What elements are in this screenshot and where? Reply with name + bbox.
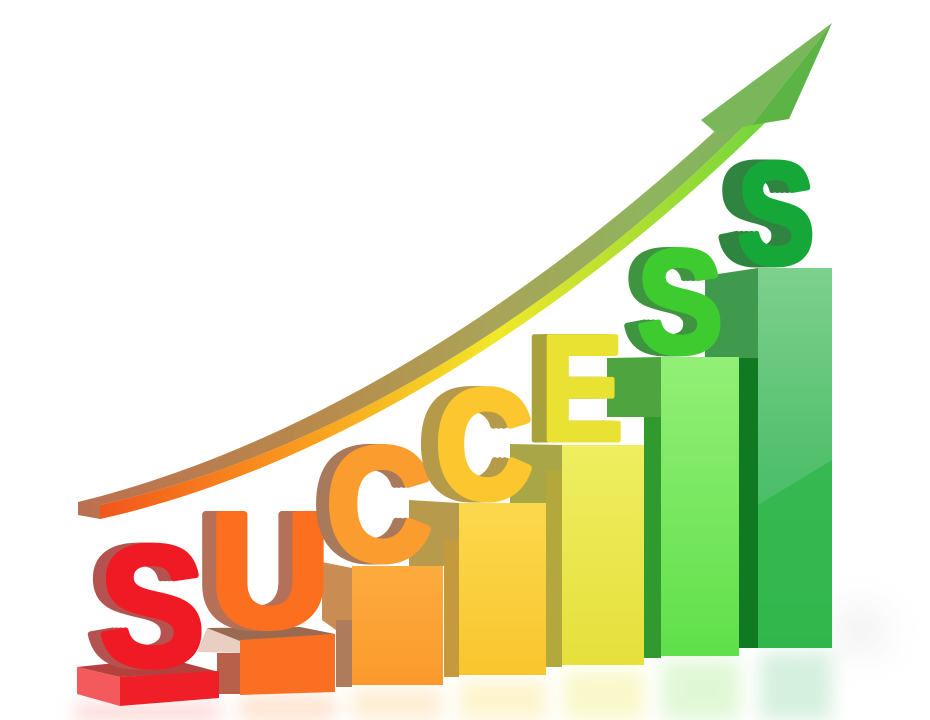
letter C, light orange: C bbox=[323, 416, 427, 594]
arrow shaft side bbox=[78, 122, 745, 519]
letter U, orange: U bbox=[206, 479, 326, 660]
growth arrow bbox=[78, 23, 832, 519]
letter S, red: S bbox=[94, 511, 200, 701]
letter S, dark green: S bbox=[718, 133, 794, 294]
letter C, amber: C bbox=[424, 359, 520, 530]
bar 3 light orange bbox=[322, 562, 443, 687]
letter C, amber: C bbox=[436, 359, 532, 530]
floor shadow and reflections bbox=[75, 610, 885, 720]
letter S, red: S bbox=[90, 511, 196, 701]
letter E, yellow: E bbox=[535, 305, 619, 473]
bar 4 amber bbox=[409, 500, 546, 677]
letter S, dark green: S bbox=[723, 133, 799, 294]
letter C, amber: C bbox=[419, 359, 515, 530]
bar 5 yellow bbox=[510, 444, 644, 667]
letter S, dark green: S bbox=[738, 133, 814, 294]
letter S, green: S bbox=[637, 221, 723, 384]
bar 1 red bbox=[77, 663, 219, 706]
letter C, light orange: C bbox=[314, 416, 418, 594]
letter S, red: S bbox=[86, 511, 192, 701]
letter U, orange: U bbox=[196, 479, 316, 660]
letter S, green: S bbox=[632, 221, 718, 384]
letter S, green: S bbox=[627, 221, 713, 384]
bar 7 dark green bbox=[705, 268, 832, 648]
letter S, dark green: S bbox=[728, 133, 804, 294]
letter S, dark green: S bbox=[733, 133, 809, 294]
letter E, yellow: E bbox=[540, 305, 624, 473]
letter S, red: S bbox=[99, 511, 205, 701]
bar 6 light green bbox=[607, 357, 739, 658]
letter C, amber: C bbox=[429, 359, 525, 530]
letter C, light orange: C bbox=[327, 416, 431, 594]
bar 2 orange bbox=[197, 627, 335, 695]
letter U, orange: U bbox=[210, 479, 330, 660]
letter U, orange: U bbox=[201, 479, 321, 660]
letter C, light orange: C bbox=[318, 416, 422, 594]
letter S, green: S bbox=[623, 221, 709, 384]
letter E, yellow: E bbox=[525, 305, 609, 473]
arrow head bbox=[701, 23, 832, 133]
letter E, yellow: E bbox=[530, 305, 614, 473]
arrow shaft face bbox=[100, 122, 766, 519]
